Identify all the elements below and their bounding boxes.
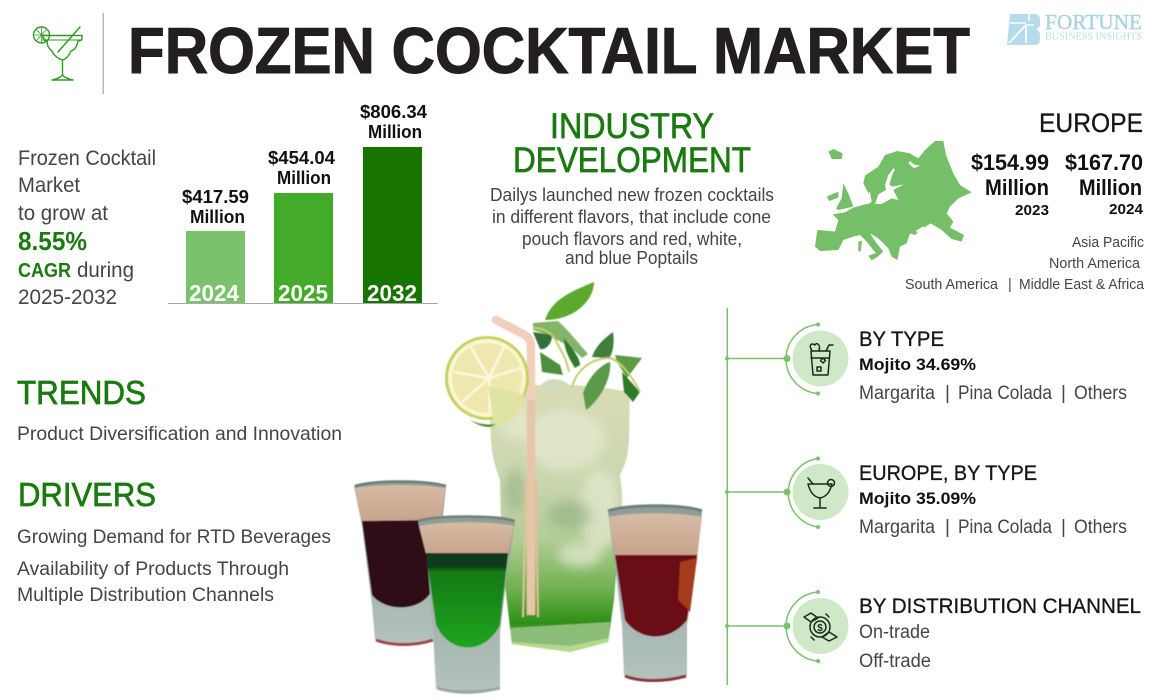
stat: Europe 2024: $167.70 [1065,150,1143,175]
segment: Europe by type: Pina Colada [958,517,1052,538]
segment: by distribution channel: Off-trade [859,651,931,672]
text: CAGR summary [18,147,156,309]
drink: tall mojito glass [445,282,642,652]
segment: by type: Margarita [859,383,935,404]
text: other regions: | [1008,277,1012,293]
section: drivers: DRIVERS [18,476,156,513]
bar: 2032: Million [368,122,422,142]
segment: by type: BY TYPE [859,328,944,351]
text: other regions: Middle East & Africa [1019,277,1145,293]
stat: Europe 2024 [1065,150,1144,218]
lemon slice [445,336,529,427]
text: industry development description: in different flavors, that include cone [492,207,771,227]
text: other regions: North America [1049,256,1141,272]
text: industry development description [490,185,774,268]
segment: Europe by type: EUROPE, BY TYPE [859,462,1037,485]
segment: Europe by type: | [945,517,950,538]
segment: Europe by type: Mojito 35.09% [859,489,976,508]
bar: 2024: Million [190,207,245,227]
bar: 2032: 2032 [367,280,417,306]
connector [725,590,820,663]
section: drivers [17,476,331,606]
section: drivers: Multiple Distribution Channels [17,585,274,606]
section: drivers: Growing Demand for RTD Beverages [17,527,331,548]
stat: Europe 2023: Million [985,175,1049,200]
text: CAGR summary: during [77,259,134,282]
timeline spine [726,308,728,685]
map: Europe [815,141,972,260]
connector [725,456,820,529]
stat: Europe 2023 [971,150,1049,219]
text: industry development description: Dailys launched new frozen cocktails [490,185,774,205]
title: FROZEN COCKTAIL MARKET [128,14,970,87]
drink: left shot glass [354,481,446,646]
bar: 2025 [268,148,335,306]
stat: Europe 2024: Million [1079,175,1142,200]
segment: by distribution channel: On-trade [859,622,930,643]
bar: 2025: Million [277,168,331,188]
text: other regions: Asia Pacific [1072,235,1144,251]
icon: cocktail glass [808,478,834,508]
segment: by type: Mojito 34.69% [859,355,976,374]
section: trends: Product Diversification and Innovation [17,424,342,445]
section: drivers: Availability of Products Through [17,559,289,580]
connector [725,322,820,396]
bar: 2032: $806.34 [360,102,427,122]
straw [496,320,538,617]
text: industry development description: pouch flavors and red, white, [522,229,742,249]
bar: 2025: $454.04 [268,148,335,168]
segment: by distribution channel: BY DISTRIBUTION CHANNEL [859,595,1141,618]
segment: Europe by type: Margarita [859,517,935,538]
header divider [102,13,104,94]
bar: 2032 [360,102,427,306]
text: other regions [905,235,1145,293]
segment: by distribution channel: $ [817,623,823,634]
text: Europe heading: EUROPE [1039,108,1143,138]
illustration: cocktails [354,282,702,694]
text: CAGR summary: Market [18,174,80,197]
text: CAGR summary: to grow at [18,202,108,225]
logo: Fortune Business Insights: BUSINESS INSIGHTS [1045,32,1142,42]
section: trends [17,374,342,445]
stat: Europe 2024: 2024 [1109,201,1144,218]
text: industry development description: and blue Poptails [565,248,698,268]
logo: Fortune Business Insights: FORTUNE [1045,10,1142,34]
segment: by type [725,322,1127,404]
text: CAGR summary: Frozen Cocktail [18,147,156,170]
text: CAGR summary: CAGR [18,260,71,282]
stat: Europe 2023: 2023 [1015,202,1049,219]
drink: middle shot glass [418,516,515,694]
segment: by type: | [1061,383,1066,404]
text: CAGR summary: 8.55% [18,226,87,256]
heading: industry development: DEVELOPMENT [513,141,751,180]
icon: margarita glass [34,27,82,80]
segment: by type: | [945,383,950,404]
logo: Fortune Business Insights [1007,10,1142,45]
heading: industry development: INDUSTRY [550,107,714,146]
bar: 2024: 2024 [189,280,239,306]
stat: Europe 2023: $154.99 [971,150,1049,175]
mint leaves [533,282,642,410]
heading: industry development [513,107,751,180]
segment: Europe by type: | [1061,517,1066,538]
segment: Europe by type: Others [1074,517,1127,538]
bar: 2024 [182,187,249,306]
bar: 2025: 2025 [278,280,328,306]
bar chart: market size [168,102,438,306]
segment: Europe by type [725,456,1127,538]
bar: 2024: $417.59 [182,187,249,207]
icon: money exchange [804,613,837,641]
text: CAGR summary: 2025-2032 [18,286,117,309]
section: trends: TRENDS [17,374,146,411]
drink: right shot glass [608,506,702,682]
segment: by type: Pina Colada [958,383,1052,404]
icon: mojito glass [810,344,833,375]
segment: by type: Others [1074,383,1127,404]
segment: by distribution channel [725,590,1141,672]
text: other regions: South America [905,277,999,293]
